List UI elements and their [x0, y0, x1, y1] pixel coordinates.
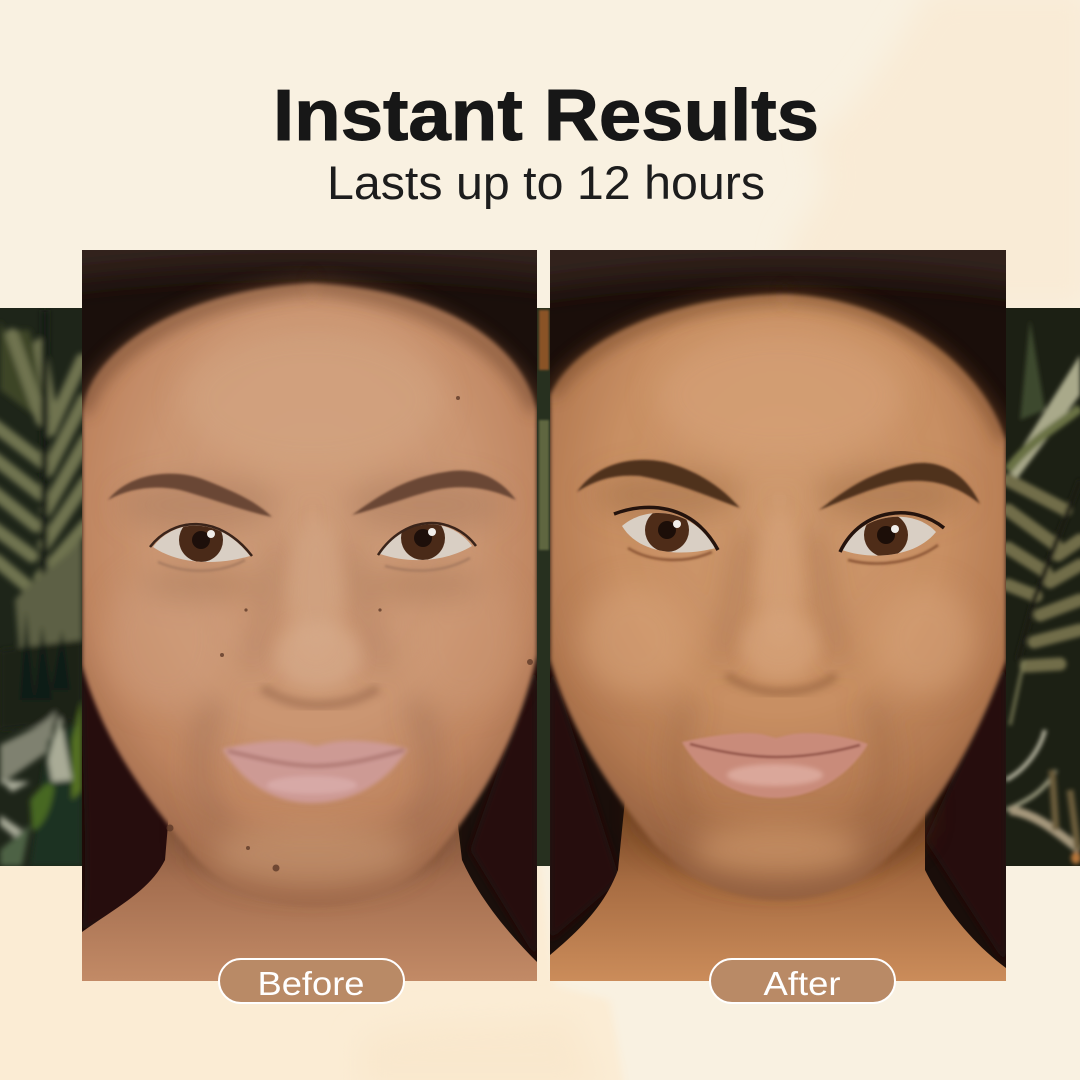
- foliage strip: right: [1006, 308, 1080, 866]
- photo: after: [550, 250, 1006, 1002]
- eye: right: [838, 511, 945, 566]
- hair: [550, 250, 1006, 1002]
- lips: [222, 741, 408, 803]
- foliage strip: centre gap: [537, 308, 550, 866]
- contour shading: [580, 330, 975, 876]
- label: after: [710, 959, 895, 1003]
- hair: [0, 180, 620, 960]
- nose: [726, 510, 836, 692]
- skin shading: [105, 330, 520, 885]
- eye: left: [613, 506, 720, 562]
- foliage strip: left: [0, 308, 86, 866]
- eye: left: [149, 522, 253, 572]
- subtitle: Lasts up to 12 hours: [327, 156, 765, 209]
- lips: [682, 733, 868, 798]
- label: before: [219, 959, 404, 1003]
- neck: [550, 800, 1006, 981]
- neck: [82, 820, 537, 981]
- moles: [166, 396, 533, 872]
- label: after: After: [764, 965, 840, 1002]
- eye: right: [377, 522, 477, 572]
- label: before: Before: [258, 965, 364, 1002]
- face: [82, 283, 537, 906]
- face: [550, 294, 1006, 900]
- eyebrows: [108, 470, 516, 517]
- title: Instant Results: [273, 76, 819, 156]
- nose: [262, 520, 378, 705]
- eyebrows: [577, 460, 980, 510]
- photo: before: [0, 180, 620, 981]
